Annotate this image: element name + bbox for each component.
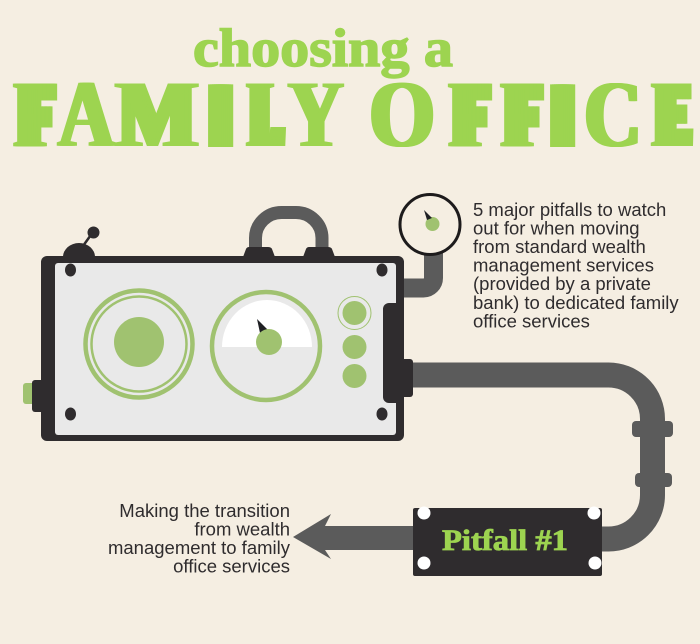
screws <box>65 264 388 420</box>
arrow <box>293 514 415 559</box>
centre gauge <box>212 292 320 400</box>
title: FAMILY OFFICE: O <box>367 61 432 167</box>
title: choosing a: choosing a <box>193 18 453 78</box>
text: making the transition: Making the transition <box>119 500 290 521</box>
left dial <box>86 290 192 398</box>
main pipe with flanges <box>410 375 673 539</box>
right connector block <box>383 303 413 403</box>
text: making the transition: from wealth <box>194 518 290 540</box>
title: FAMILY OFFICE: M <box>113 61 192 167</box>
text: making the transition: office services <box>173 556 290 576</box>
plate: Pitfall #1: Pitfall #1 <box>442 524 568 557</box>
indicator lights <box>338 296 371 388</box>
title: FAMILY OFFICE: A <box>56 61 112 167</box>
title: FAMILY OFFICE: I <box>544 66 569 167</box>
icon: left knob <box>23 380 46 412</box>
small gauge <box>400 194 460 254</box>
icon: handle pipe <box>243 212 335 257</box>
plate: Pitfall #1 <box>413 506 602 576</box>
text: five major pitfalls <box>473 199 679 332</box>
text: five major pitfalls: out for when moving <box>473 218 640 238</box>
title: FAMILY OFFICE: F <box>499 61 530 167</box>
title: FAMILY OFFICE: C <box>582 61 639 167</box>
machine body <box>41 256 413 441</box>
title: FAMILY OFFICE: Y <box>286 61 341 167</box>
text: five major pitfalls: office services <box>473 310 590 332</box>
text: five major pitfalls: 5 major pitfalls to watch <box>473 199 666 220</box>
text: five major pitfalls: bank) to dedicated family <box>473 292 679 313</box>
icon: dome with antenna <box>63 226 100 257</box>
title: FAMILY OFFICE: E <box>650 61 681 167</box>
title: FAMILY OFFICE: F <box>12 61 43 167</box>
text: making the transition <box>108 500 291 576</box>
pipe to small gauge <box>400 252 434 288</box>
title: FAMILY OFFICE: F <box>447 61 478 167</box>
title: FAMILY OFFICE: I <box>202 66 227 167</box>
title: FAMILY OFFICE <box>12 61 694 167</box>
text: five major pitfalls: management services <box>473 254 654 276</box>
text: five major pitfalls: (provided by a private <box>473 273 651 294</box>
text: making the transition: management to family <box>108 537 291 558</box>
title: FAMILY OFFICE: L <box>245 61 274 167</box>
text: five major pitfalls: from standard wealth <box>473 236 646 257</box>
